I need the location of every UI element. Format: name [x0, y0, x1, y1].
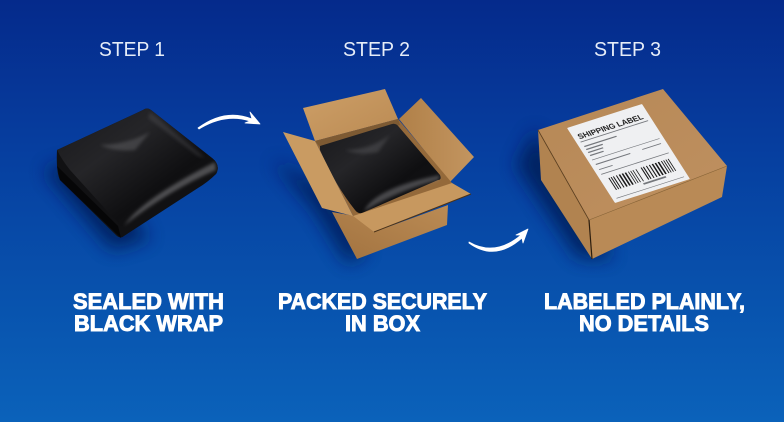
caption: step 3: NO DETAILS — [579, 311, 709, 336]
caption: step 1 — [73, 289, 224, 336]
caption: step 1: BLACK WRAP — [74, 311, 223, 336]
box body — [332, 205, 448, 259]
caption: step 2 — [278, 289, 487, 336]
label address lines — [580, 120, 684, 199]
arrow: step 2 to step 3 — [469, 229, 528, 251]
step 1 label: STEP 1 — [99, 39, 165, 61]
icon: open cardboard box with package — [272, 89, 474, 264]
right flap — [399, 98, 474, 182]
shipping label — [567, 104, 690, 203]
box front side — [589, 166, 727, 259]
arrow: step 1 to step 2 — [198, 112, 260, 129]
left flap — [283, 132, 353, 216]
label barcode — [609, 159, 676, 190]
front flap — [353, 183, 471, 232]
caption: step 1: SEALED WITH — [73, 289, 224, 314]
step 3 label: STEP 3 — [594, 39, 661, 61]
box top — [538, 89, 727, 220]
icon: closed labeled box — [516, 89, 727, 259]
box interior — [315, 119, 452, 232]
caption: step 3: LABELED PLAINLY, — [544, 289, 745, 314]
caption: step 2: IN BOX — [345, 311, 420, 336]
step 2 label: STEP 2 — [343, 39, 410, 61]
box left side — [538, 130, 592, 259]
caption: step 3 — [544, 289, 745, 336]
icon: black wrapped package — [44, 108, 218, 250]
package inside box — [320, 124, 441, 213]
label heading: SHIPPING LABEL — [576, 112, 646, 141]
back flap — [303, 89, 398, 141]
caption: step 2: PACKED SECURELY — [278, 289, 487, 314]
